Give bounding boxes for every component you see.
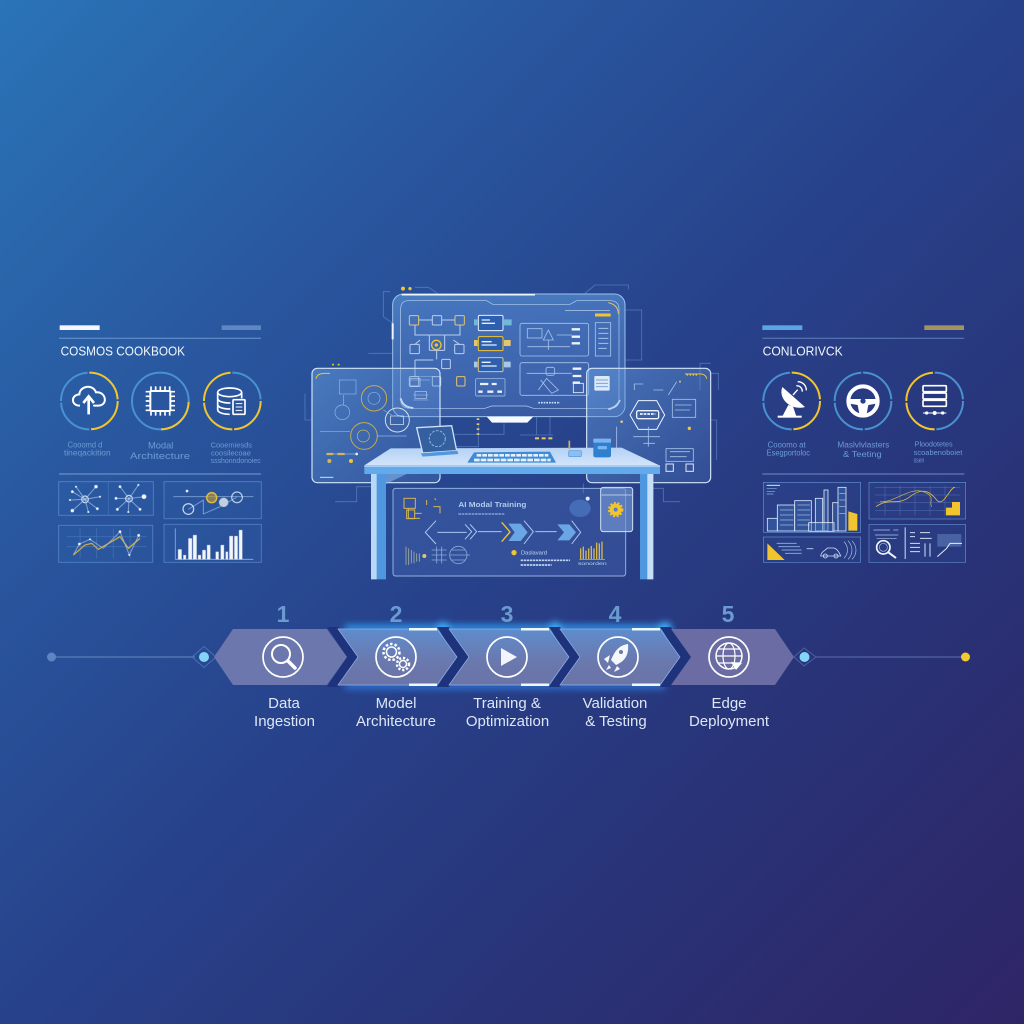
caption: Daslavard	[521, 551, 547, 557]
panel: right sidebar	[762, 325, 966, 562]
timeline: right connector	[794, 648, 970, 666]
illustration: central workstation	[305, 285, 718, 579]
chart: node flow	[164, 482, 261, 519]
label: Optimization	[466, 713, 549, 730]
step 3: training and optimization	[449, 601, 569, 730]
label: Data	[268, 695, 300, 712]
icon: satellite dish	[763, 373, 820, 429]
step 5: edge deployment	[671, 601, 794, 730]
panel: left floating screen	[312, 368, 440, 483]
icon: magnifier	[263, 637, 303, 677]
text block: circle labels: tineqackition	[64, 449, 111, 458]
text block: circle labels: Cooemiesds	[211, 441, 252, 450]
particle cloud	[569, 500, 591, 517]
schematic icon	[404, 498, 440, 519]
illustration: desk	[364, 448, 660, 579]
label: Model	[376, 695, 416, 712]
heading: conlorivck: CONLORIVCK	[763, 344, 843, 359]
icon: server stack	[906, 373, 963, 429]
chart: bar chart	[164, 524, 261, 562]
mini bar chart	[578, 542, 607, 566]
icon: gears	[376, 637, 416, 677]
highlight bars	[521, 628, 549, 686]
chart: line graph	[59, 525, 153, 562]
chart: city skyline blueprint	[763, 482, 861, 532]
icon: keyboard	[467, 452, 556, 463]
text block: circle labels: ssshonndonoiec	[211, 456, 261, 465]
text block: circle labels	[767, 440, 962, 465]
text block: circle labels: Esegportoloc	[767, 449, 810, 458]
text block: circle labels	[64, 440, 261, 465]
panel: main monitor	[393, 294, 625, 423]
number 1: 1	[277, 601, 290, 627]
icon: laptop	[417, 426, 458, 457]
number 3: 3	[501, 601, 513, 627]
panel: right floating screen	[587, 368, 711, 483]
card with gear	[601, 487, 633, 532]
text block: circle labels: Cooomo at	[768, 440, 806, 449]
workflow arrows	[425, 521, 581, 544]
label: Architecture	[356, 713, 436, 730]
mini bar chart: sonorden	[578, 561, 607, 566]
icon: microchip	[131, 372, 190, 430]
chevron gap shadows	[327, 627, 691, 687]
icon: rocket	[598, 637, 638, 677]
text block: circle labels: & Teeting	[843, 450, 882, 459]
text block: circle labels: Cooomd d	[68, 440, 102, 449]
text block: circle labels: ssen	[914, 456, 924, 465]
label: Edge	[711, 695, 747, 712]
header accent bars	[60, 325, 261, 330]
label: Ingestion	[254, 713, 315, 730]
label: Deployment	[689, 713, 770, 730]
timeline glow	[345, 622, 672, 689]
label: Validation	[583, 695, 647, 712]
text block: circle labels: Ploodotetes	[915, 440, 953, 449]
flow diagram	[409, 316, 465, 386]
icon: database	[204, 373, 261, 429]
label: Training &	[473, 695, 541, 712]
icon: cloud upload	[61, 373, 118, 429]
number 5: 5	[722, 601, 735, 627]
timeline: left connector	[47, 646, 216, 668]
text block: circle labels: Modal	[148, 440, 173, 450]
icon: globe	[709, 637, 749, 677]
text block: circle labels: Maslvlvlasters	[837, 440, 889, 449]
panel: ai model training	[393, 487, 633, 576]
module cards	[474, 315, 512, 396]
monitor stand	[487, 417, 533, 423]
yellow status beads under monitor	[477, 418, 552, 439]
number 4: 4	[609, 601, 622, 627]
highlight bars	[409, 628, 437, 686]
mini diagram bottom left	[406, 546, 470, 565]
heading: ai modal training: AI Modal Training	[458, 500, 527, 509]
number 2: 2	[390, 601, 402, 627]
icon: desk objects	[569, 439, 611, 457]
icon: play	[487, 637, 527, 677]
step 1: data ingestion	[214, 601, 347, 730]
chart: trend lines	[869, 482, 966, 519]
highlight bars	[632, 628, 660, 686]
chart: sign and car	[763, 537, 861, 562]
circuit connectors	[305, 285, 718, 502]
panel: cosmos cookbook left sidebar	[59, 325, 261, 562]
step 4: validation and testing	[560, 601, 680, 730]
header accent bars	[762, 325, 964, 330]
label: & Testing	[585, 713, 647, 730]
text block: circle labels: Architecture	[130, 451, 190, 461]
icon: steering wheel	[835, 373, 891, 429]
right diagrams	[520, 323, 611, 395]
chart: network diagrams	[59, 482, 153, 515]
chart: magnifier and data	[869, 525, 966, 562]
text block: circle labels: coosilecoae	[211, 448, 251, 457]
text block: circle labels: scoabenoboiet	[914, 448, 962, 457]
heading: cosmos cookbook: COSMOS COOKBOOK	[61, 344, 185, 359]
step 2: model architecture	[338, 601, 457, 730]
